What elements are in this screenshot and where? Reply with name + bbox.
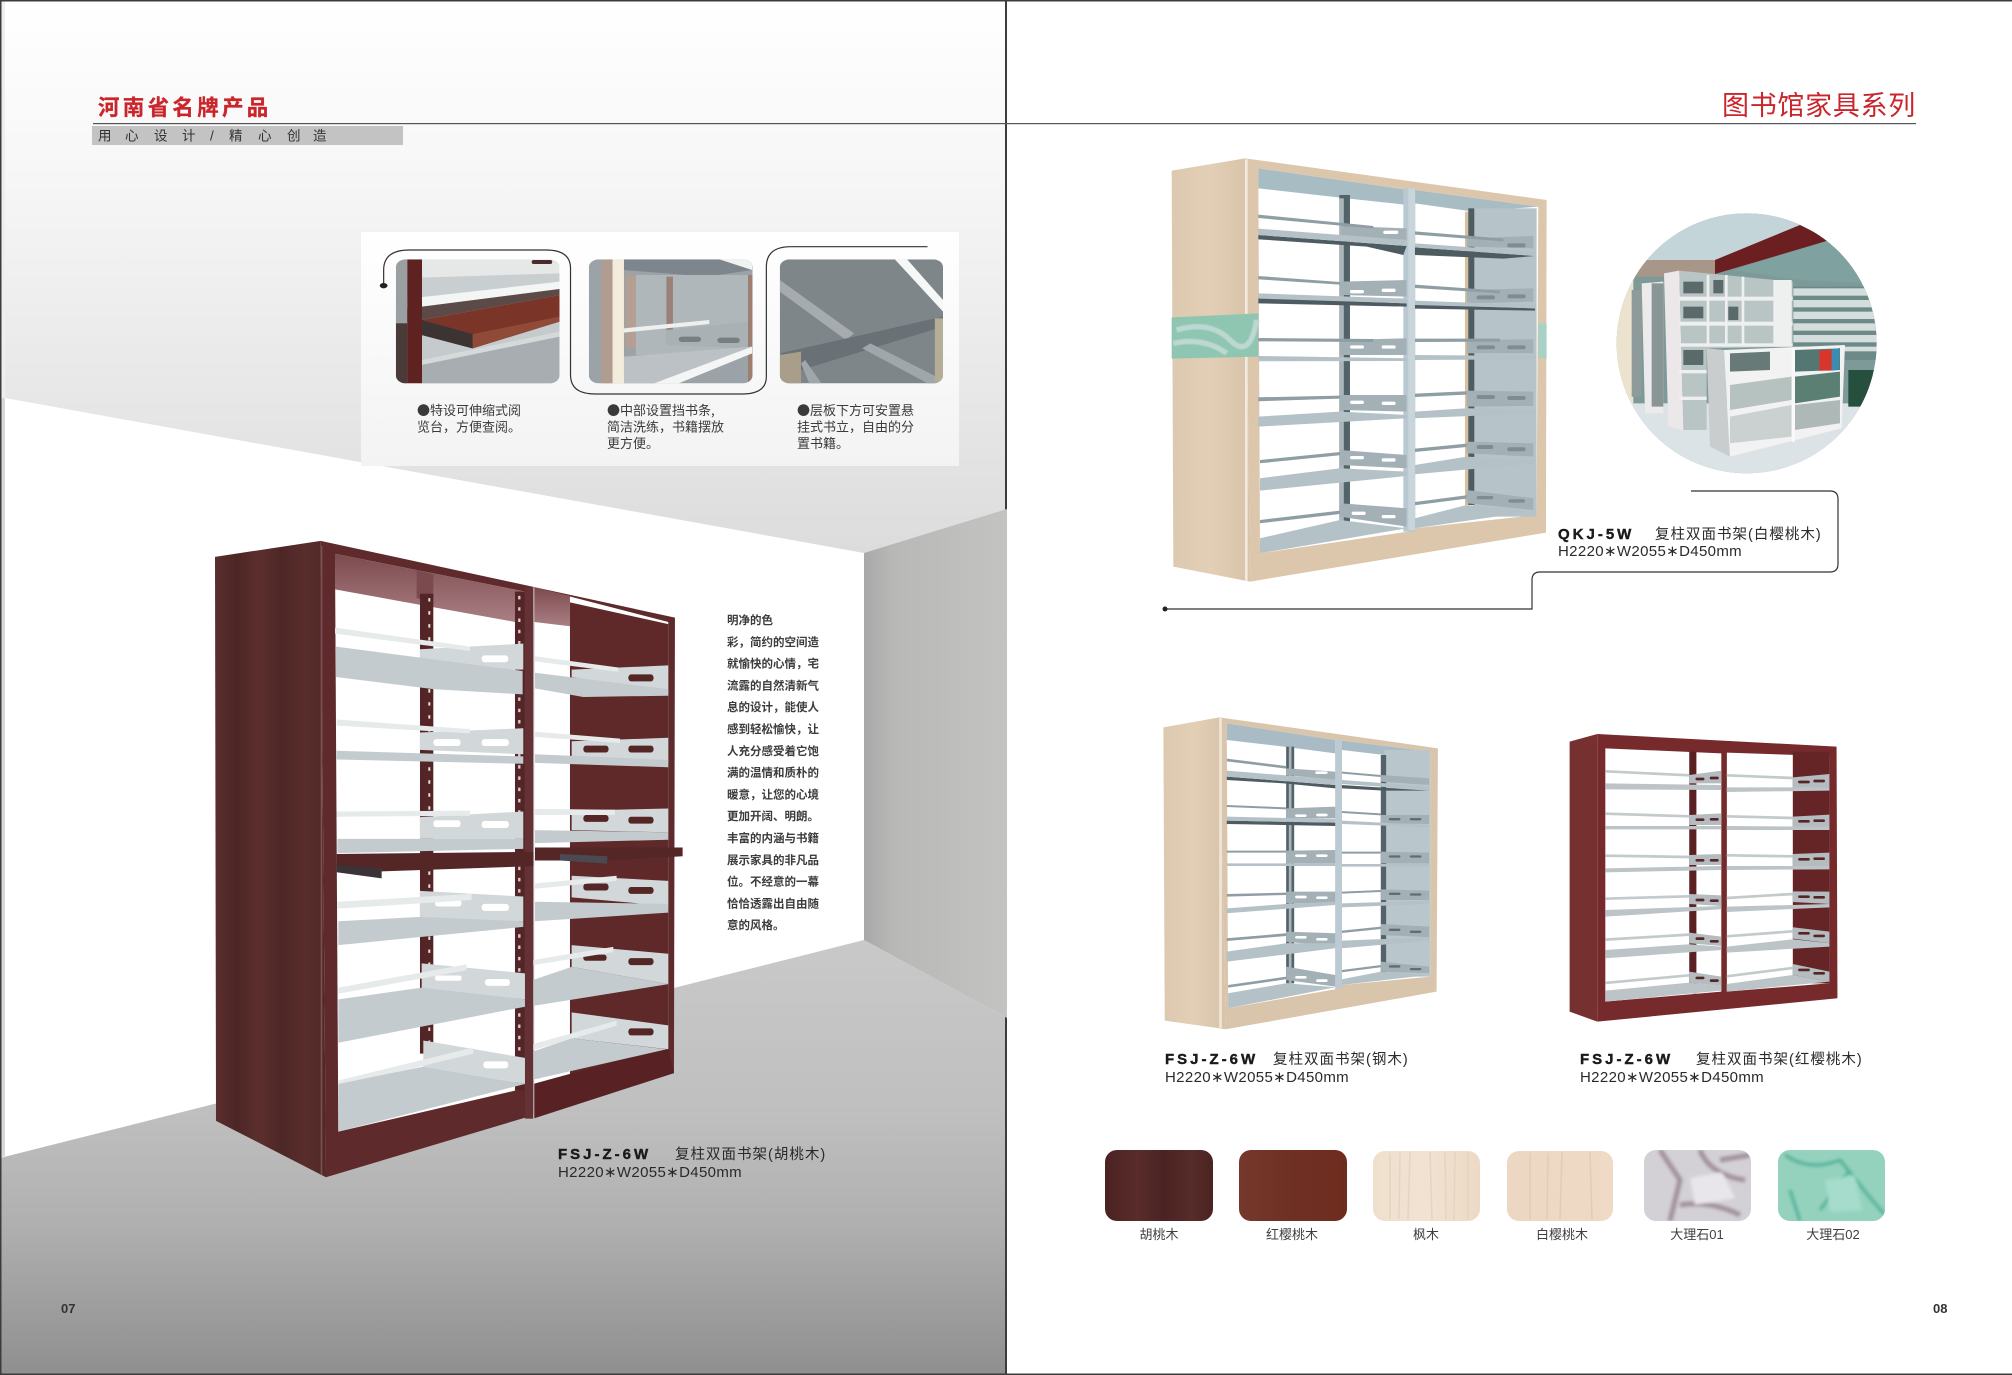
text block: description	[727, 613, 819, 932]
caption: book stop: ●中部设置挡书条,	[607, 400, 715, 419]
caption: hanging book stand: ●层板下方可安置悬	[797, 400, 914, 419]
swatch: red cherry: 红樱桃木	[1266, 1227, 1318, 1242]
page number 07: 07	[61, 1301, 75, 1316]
page number 08: 08	[1933, 1301, 1947, 1316]
text block: description: 满的温情和质朴的	[727, 766, 819, 780]
shelves: right bay	[1415, 231, 1535, 528]
photo: library interior circle	[1613, 210, 1880, 477]
product: FSJ-Z-6W red cherry bookshelf	[1570, 734, 1837, 1022]
caption: FSJ-Z-6W maple	[1165, 1050, 1409, 1086]
caption: reading desk: ●特设可伸缩式阅	[417, 400, 521, 419]
heading: right series title: 图书馆家具系列	[1722, 91, 1916, 121]
photo: pull-out reading desk	[396, 259, 560, 383]
caption: reading desk: 览台，方便查阅。	[417, 416, 521, 436]
caption: FSJ-Z-6W red cherry	[1580, 1050, 1863, 1086]
product: walnut double-sided bookshelf	[215, 541, 683, 1177]
connector dot	[380, 283, 388, 288]
swatch: maple	[1373, 1151, 1480, 1242]
photo: central book-stop bar	[589, 259, 752, 383]
openings	[1258, 168, 1408, 553]
swatch: marble 02: 大理石02	[1806, 1227, 1860, 1242]
subtitle bar: 用心设计/精心创造	[98, 128, 327, 144]
text block: description: 流露的自然清新气	[727, 678, 819, 692]
swatches: finish samples	[1105, 1150, 1885, 1242]
right bay opening	[533, 587, 668, 1084]
text block: description: 位。不经意的一幕	[727, 875, 819, 889]
swatch: white cherry: 白樱桃木	[1536, 1227, 1588, 1242]
caption: FSJ-Z-6W maple: FSJ-Z-6W	[1165, 1051, 1258, 1068]
uprights	[420, 594, 433, 1054]
caption: book stop: 简洁洗练，书籍摆放	[607, 416, 724, 436]
subtitle bar	[92, 126, 403, 145]
text block: description: 意的风格。	[727, 918, 784, 932]
shelves: right bay	[533, 656, 683, 1080]
caption: QKJ-5W: H2220∗W2055∗D450mm	[1558, 543, 1742, 560]
swatch: marble 02	[1778, 1150, 1885, 1242]
side panel	[215, 541, 326, 1177]
panel: feature details	[361, 232, 959, 466]
text block: description: 更加开阔、明朗。	[727, 809, 819, 823]
caption: QKJ-5W: 复柱双面书架(白樱桃木)	[1655, 525, 1822, 543]
caption: hanging book stand: 置书籍。	[797, 433, 849, 452]
connector curve	[384, 247, 928, 394]
front frame	[321, 541, 675, 1177]
heading: left brand title: 河南省名牌产品	[98, 96, 272, 120]
swatch: walnut	[1105, 1150, 1213, 1242]
text block: description: 暖意，让您的心境	[727, 787, 819, 801]
caption: FSJ-Z-6W walnut: H2220∗W2055∗D450mm	[558, 1164, 742, 1181]
left page background	[0, 0, 1007, 1375]
caption: FSJ-Z-6W maple: 复柱双面书架(钢木)	[1273, 1050, 1409, 1068]
shelves: left bay	[335, 628, 533, 1132]
shelves: red cherry left bay	[1605, 770, 1721, 1002]
shelves: left bay	[1258, 215, 1407, 553]
product: QKJ-5W white cherry bookshelf	[1172, 158, 1547, 582]
left bay opening	[335, 554, 525, 1132]
text block: description: 明净的色	[727, 613, 773, 627]
swatch: marble 01	[1644, 1150, 1751, 1242]
right wall of room	[864, 509, 1007, 1018]
uprights	[1339, 195, 1350, 535]
caption: FSJ-Z-6W walnut: 复柱双面书架(胡桃木)	[675, 1145, 826, 1163]
text block: description: 恰恰透露出自由随	[727, 896, 819, 910]
caption: FSJ-Z-6W red cherry: H2220∗W2055∗D450mm	[1580, 1069, 1764, 1086]
text block: description: 就愉快的心情，宅	[727, 657, 819, 671]
caption: FSJ-Z-6W maple: H2220∗W2055∗D450mm	[1165, 1069, 1349, 1086]
front frame	[1245, 158, 1547, 582]
text block: description: 展示家具的非凡品	[727, 853, 819, 867]
text block: description: 彩，简约的空间造	[727, 635, 819, 649]
shelves: red cherry right bay	[1727, 774, 1829, 992]
caption: FSJ-Z-6W red cherry: 复柱双面书架(红樱桃木)	[1696, 1050, 1863, 1068]
side panel	[1172, 158, 1250, 582]
callout: connector line	[1162, 491, 1838, 612]
product: FSJ-Z-6W maple bookshelf	[1163, 717, 1438, 1029]
header rule	[93, 123, 1916, 124]
caption: QKJ-5W: QKJ-5W	[1558, 526, 1634, 543]
caption: QKJ-5W	[1558, 525, 1822, 560]
swatch: marble 01: 大理石01	[1670, 1227, 1724, 1242]
shelves: maple left bay	[1227, 759, 1335, 1008]
swatch: walnut: 胡桃木	[1139, 1227, 1179, 1242]
text block: description: 感到轻松愉快，让	[727, 722, 819, 736]
caption: FSJ-Z-6W walnut: FSJ-Z-6W	[558, 1146, 651, 1163]
swatch: white cherry	[1507, 1151, 1613, 1242]
text block: description: 丰富的内涵与书籍	[727, 831, 819, 845]
marble bands	[1172, 313, 1547, 359]
shelves: maple right bay	[1342, 772, 1429, 985]
swatch: red cherry	[1239, 1150, 1347, 1242]
text block: description: 息的设计，能使人	[727, 700, 819, 714]
swatch: maple: 枫木	[1413, 1227, 1439, 1242]
caption: FSJ-Z-6W walnut	[558, 1145, 826, 1181]
caption: book stop: 更方便。	[607, 433, 659, 452]
text block: description: 人充分感受着它饱	[727, 744, 819, 758]
photo: shelf underside	[780, 259, 943, 383]
caption: FSJ-Z-6W red cherry: FSJ-Z-6W	[1580, 1051, 1673, 1068]
caption: hanging book stand: 挂式书立，自由的分	[797, 416, 914, 436]
